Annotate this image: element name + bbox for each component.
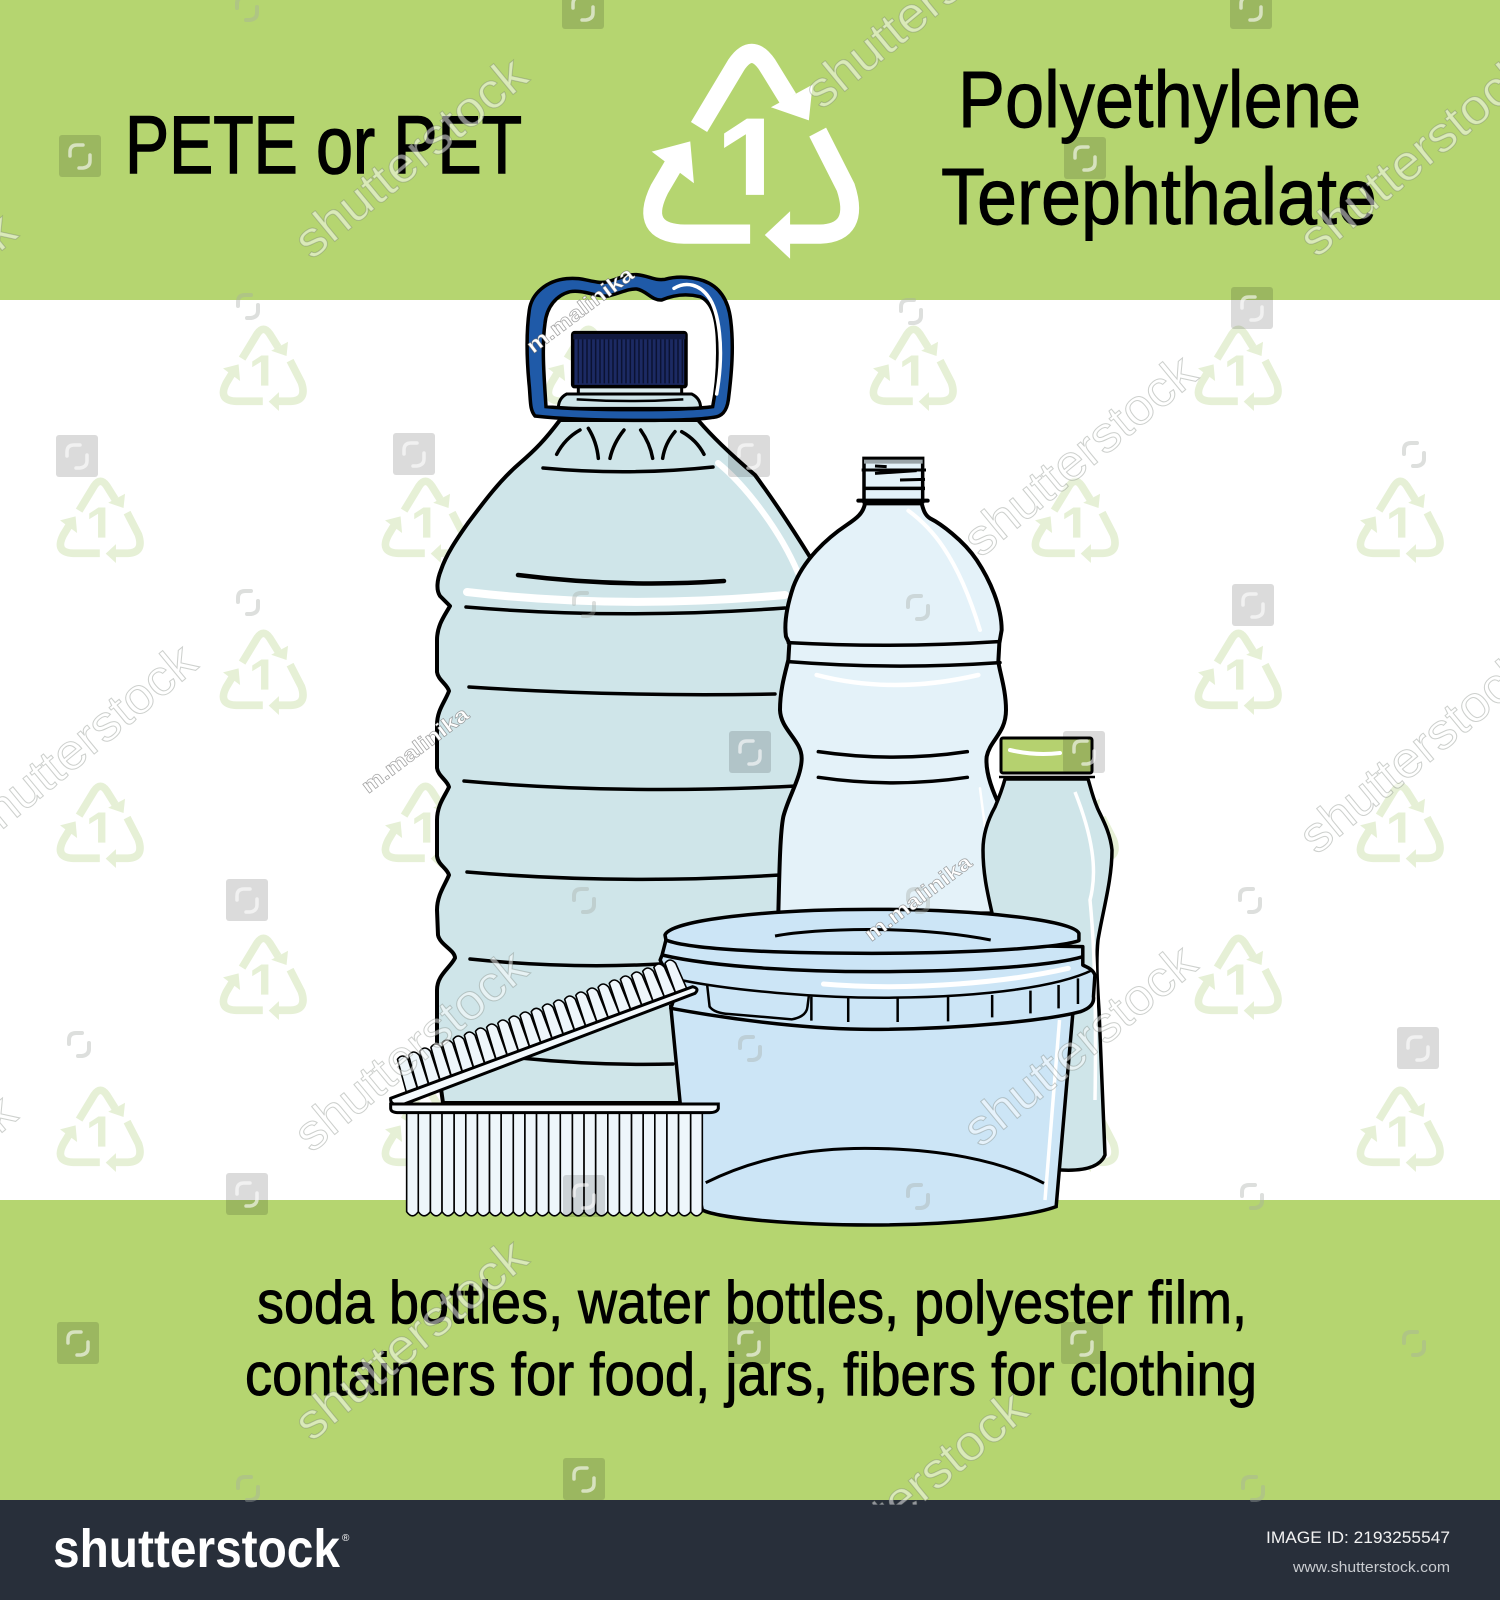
background pattern of recycling symbols: 1: [249, 649, 278, 708]
background pattern of recycling symbols: 1: [86, 802, 115, 861]
small bottle with green cap: [983, 738, 1112, 1170]
background pattern of recycling symbols: 1: [411, 497, 440, 556]
footer bar: [0, 1500, 1500, 1600]
background pattern of recycling symbols: 1: [1386, 802, 1415, 861]
background pattern of recycling symbols: 1: [86, 497, 115, 556]
tray base ribs: [407, 1112, 702, 1216]
background pattern of recycling symbols: 1: [1386, 497, 1415, 556]
background pattern of recycling symbols: 1: [249, 954, 278, 1013]
large water bottle: [437, 275, 830, 1103]
collar, ribs and highlights: [788, 501, 1000, 840]
stock watermarks: shutterstock: [952, 933, 1208, 1157]
tray lid ribs: [397, 960, 687, 1099]
author watermarks: m.malinika: [522, 262, 639, 358]
background pattern of recycling symbols: [60, 329, 1440, 1171]
icon: recycling symbol number 1: 1: [715, 91, 788, 240]
author watermarks: m.malinika: [357, 702, 474, 798]
background pattern of recycling symbols: 1: [1386, 1106, 1415, 1165]
stock watermarks: shutterstock: [283, 938, 539, 1162]
background pattern of recycling symbols: 1: [86, 1106, 115, 1165]
highlights and ribs: [464, 463, 798, 1064]
neck ring: [999, 776, 1095, 778]
background pattern of recycling symbols: 1: [249, 345, 278, 404]
author watermarks: [357, 262, 977, 946]
heading: Polyethylene Terephthalate: [941, 55, 1377, 241]
stock watermarks: shutterstock: [783, 1379, 1039, 1600]
base curve: [706, 1148, 1044, 1183]
background pattern of recycling symbols: 1: [1224, 954, 1253, 1013]
lid arc: [775, 929, 991, 940]
neck, cap and handle: [527, 275, 732, 458]
bottle body: [437, 420, 830, 1103]
header band: [0, 0, 1500, 300]
icon: recycling symbol number 1: [653, 53, 850, 256]
heading: Polyethylene Terephthalate: Polyethylene: [958, 55, 1361, 144]
bucket with lid: [660, 909, 1095, 1225]
stock watermarks: shutterstock: [283, 45, 539, 269]
medium plastic bottle: [778, 458, 1007, 913]
author watermarks: m.malinika: [860, 850, 977, 946]
tray base bar: [391, 1104, 718, 1113]
bottle body: [778, 503, 1007, 913]
stock watermarks: shutterstock: [952, 343, 1208, 567]
lid: [665, 909, 1079, 953]
heading: Polyethylene Terephthalate: Terephthalate: [941, 152, 1377, 241]
description text: containers for food, jars, fibers for clothing: [245, 1341, 1257, 1408]
bottle neck: [862, 458, 926, 502]
stock watermarks: shutterstock: [283, 1227, 539, 1451]
background pattern of recycling symbols: 1: [574, 345, 603, 404]
rim: [660, 940, 1095, 1029]
footer logo: shutterstock: [53, 1519, 341, 1579]
background pattern of recycling symbols: 1: [411, 1106, 440, 1165]
bottom band: [0, 1200, 1500, 1500]
tray lid bar: [391, 987, 697, 1105]
background pattern of recycling symbols: 1: [1224, 345, 1253, 404]
footer logo: ®: [342, 1533, 350, 1544]
background pattern of recycling symbols: 1: [1061, 497, 1090, 556]
heading: PETE or PET: PETE or PET: [125, 100, 522, 191]
description text: soda bottles, water bottles, polyester film,: [257, 1269, 1247, 1336]
background pattern of recycling symbols: 1: [1224, 649, 1253, 708]
bucket body: [671, 1007, 1073, 1225]
background pattern of recycling symbols: 1: [899, 345, 928, 404]
side highlight: [1045, 1020, 1060, 1200]
background pattern of recycling symbols: 1: [1061, 802, 1090, 861]
rim lines: [662, 955, 1092, 1022]
bottle body: [983, 779, 1112, 1170]
open ribbed food tray: [391, 960, 718, 1216]
image id: IMAGE ID: 2193255547: [1266, 1528, 1450, 1547]
rim highlight: [823, 968, 1068, 987]
background pattern of recycling symbols: 1: [411, 802, 440, 861]
website: www.shutterstock.com: [1292, 1559, 1450, 1576]
cap highlight: [1010, 750, 1060, 754]
green cap: [1001, 738, 1092, 773]
highlight: [1075, 792, 1095, 1100]
description text: [245, 1269, 1257, 1408]
background pattern of recycling symbols: 1: [1061, 1106, 1090, 1165]
